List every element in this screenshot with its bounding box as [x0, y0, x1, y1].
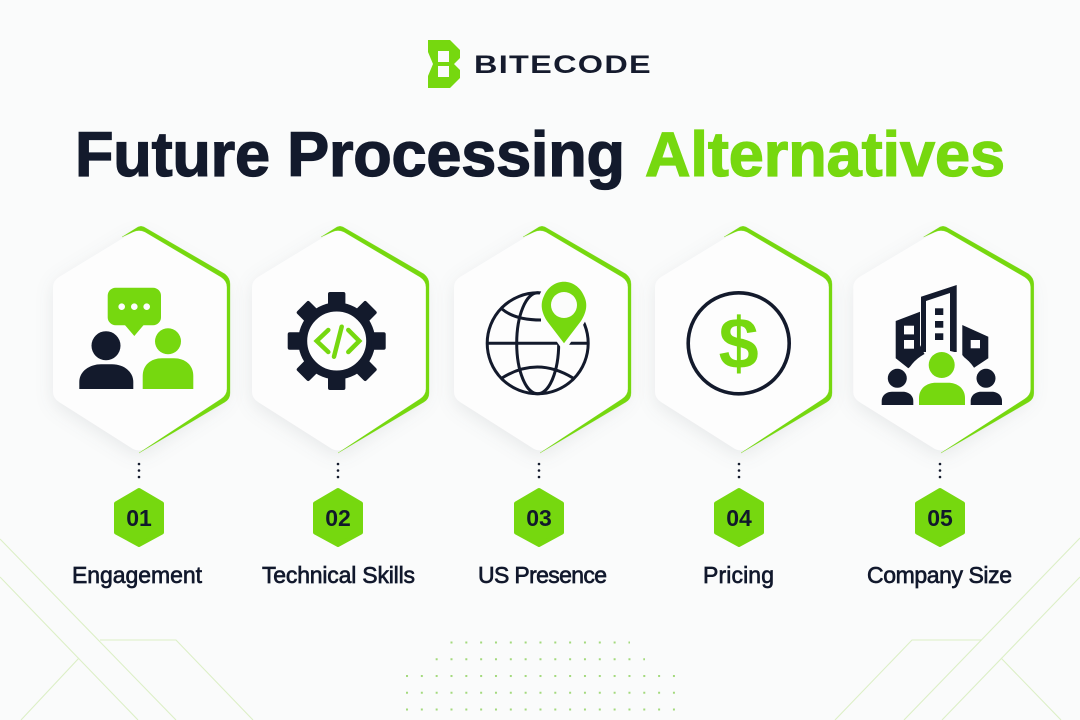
label: Technical Skills [262, 562, 415, 588]
label: Pricing [703, 562, 774, 588]
connector dots [939, 463, 941, 478]
hexagon card [454, 226, 631, 453]
icon: globe with pin [487, 282, 588, 394]
number badge 01 [116, 490, 162, 545]
number badge 05 [917, 490, 963, 545]
icon: gear with code [288, 292, 386, 390]
panel: Company Size [853, 226, 1034, 588]
icon: buildings and people [882, 285, 1002, 427]
label: Engagement [72, 562, 203, 588]
icon: dollar coin: $ [719, 304, 759, 384]
title [75, 120, 1005, 190]
number badge 01: 01 [126, 505, 152, 531]
number badge 02: 02 [325, 505, 351, 531]
number badge 05: 05 [927, 505, 953, 531]
hexagon card [853, 226, 1034, 453]
hexagon card [655, 226, 832, 453]
label: US Presence [478, 562, 607, 588]
hexagon card [53, 226, 230, 453]
number badge 03: 03 [526, 505, 552, 531]
number badge 03 [516, 490, 562, 545]
title: Future Processing [75, 120, 625, 190]
number badge 04 [716, 490, 762, 545]
connector dots [538, 463, 540, 478]
connector dots [337, 463, 339, 478]
connector dots [138, 463, 140, 478]
wordmark: BITECODE [474, 51, 652, 79]
panel: Engagement [53, 226, 230, 588]
number badge 02 [315, 490, 361, 545]
icon: dollar coin [688, 293, 789, 394]
panel: Technical Skills [252, 226, 429, 588]
logo: Bitecode [428, 40, 652, 88]
panel: US Presence [454, 226, 631, 588]
connector dots [738, 463, 740, 478]
title: Alternatives [645, 120, 1005, 190]
icon: B mark [428, 40, 460, 88]
icon: two people talking [79, 288, 193, 389]
number badge 04: 04 [726, 505, 752, 531]
panel: Pricing [655, 226, 832, 588]
label: Company Size [867, 562, 1012, 588]
hexagon card [252, 226, 429, 453]
